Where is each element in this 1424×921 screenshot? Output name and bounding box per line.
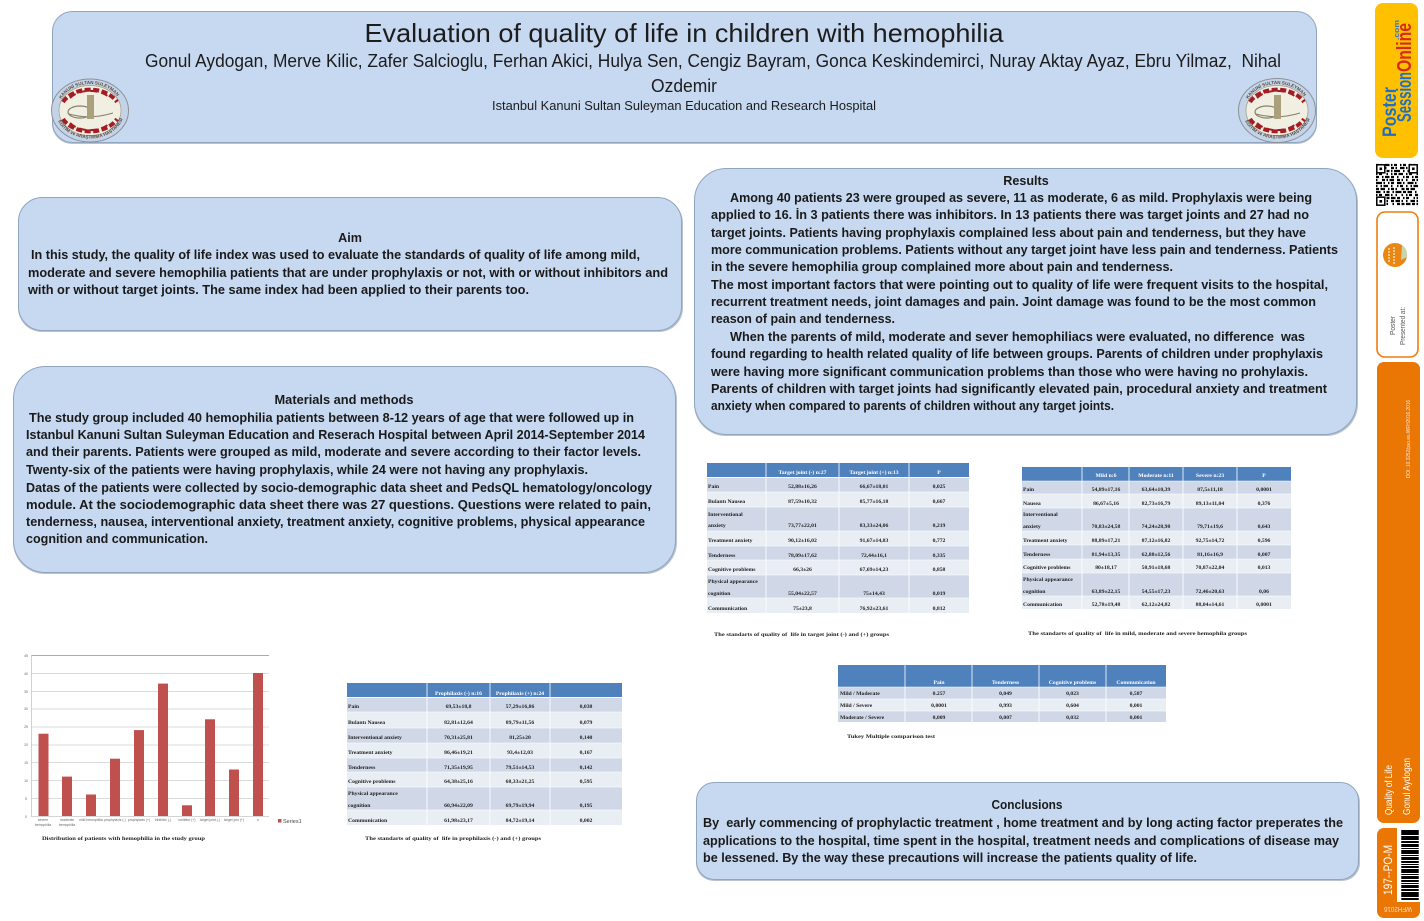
table: severity groups: 52,78±19,48 [1092, 602, 1121, 608]
table: target joint groups [707, 463, 969, 613]
table: target joint groups: Pain [708, 484, 720, 490]
table: prophylaxis groups: 60,94±22,09 [444, 803, 473, 809]
table: target joint groups: 0,812 [933, 606, 946, 612]
table: severity groups: 62,88±12,56 [1142, 552, 1171, 558]
table: prophylaxis groups: 0,595 [580, 779, 593, 785]
table: Tukey comparison: 0,023 [1066, 691, 1079, 697]
text: conclusions body: By early commencing of prophylactic treatment , home treatment and by long acting factor preperates the [703, 815, 1343, 830]
table: severity groups: Severe n:23 [1196, 473, 1224, 479]
table: prophylaxis groups: 0,002 [580, 818, 593, 824]
text: results body: recurrent treatment needs, joint damages and pain. Joint damage was found to be the most common [711, 294, 1316, 309]
heading: materials and methods: Materials and methods [274, 393, 414, 407]
panel: conclusions [696, 782, 1360, 881]
text: materials and methods body: The study group included 40 hemophilia patients between 8-12 years of age that were followed up in [29, 410, 634, 425]
table: severity groups: 0,013 [1258, 565, 1271, 571]
table: prophylaxis groups: 81,25±20 [509, 735, 531, 741]
table: severity groups: 0,06 [1259, 589, 1269, 595]
table: severity groups: 87,5±11,18 [1197, 487, 1223, 493]
text: results body [710, 190, 1338, 413]
table: target joint groups: 85,77±16,18 [860, 499, 889, 505]
table: prophylaxis groups: Prophilaxis (-) n:16 [435, 690, 482, 697]
table: severity groups [1022, 467, 1291, 609]
table: prophylaxis groups: 89,79±11,56 [506, 720, 534, 726]
axis labels: 0 [25, 815, 27, 819]
table: target joint groups: Physical appearance [708, 579, 758, 585]
table: target joint groups: 87,59±10,32 [788, 499, 817, 505]
authors: Ozdemir [651, 76, 717, 96]
table: severity groups: 0,007 [1258, 552, 1271, 558]
table: prophylaxis groups: 0,079 [580, 720, 593, 726]
axis labels [24, 654, 259, 827]
table: severity groups: 62,12±24,82 [1142, 602, 1171, 608]
table: target joint groups: 0,858 [933, 567, 946, 573]
table: target joint groups: anxiety [708, 523, 726, 529]
sidebar: PosterSessionOnline logo: Online [1394, 23, 1416, 72]
table: severity groups: anxiety [1023, 524, 1041, 530]
text: results body: Parents of children with target joints had significantly elevated pain, procedural anxiety and treatment [711, 381, 1328, 396]
axis labels: 45 [24, 654, 28, 658]
table: Tukey comparison: Pain [933, 680, 945, 686]
text: results body: found regarding to health related quality of life between groups. Parents of children under prophylaxis [711, 346, 1323, 361]
table: severity groups: 86,67±5,16 [1093, 501, 1119, 507]
text: materials and methods body: module. At the sociodemographic data sheet there was 27 questions. Questions were related to pain, [26, 497, 651, 512]
table: target joint groups: 55,04±22,57 [788, 591, 817, 597]
table: target joint groups: 91,67±14,83 [860, 538, 889, 544]
table: severity groups: 81,16±16,9 [1197, 552, 1223, 558]
table: Tukey comparison: Communication [1116, 680, 1156, 686]
table: target joint groups: 66,3±26 [793, 567, 812, 573]
table: prophylaxis groups: 0,038 [580, 704, 593, 710]
axis labels: inhibitor (+) [178, 818, 196, 822]
icon: hospital logo right: EĞİTİM ve ARAŞTIRMA HASTANESİ [1245, 118, 1310, 140]
table: Tukey comparison: 0,001 [1130, 715, 1143, 721]
text: results body: anxiety when compared to parents of children without any target joints. [711, 398, 1114, 413]
table: prophylaxis groups: 84,72±19,14 [506, 818, 535, 824]
table: severity groups: Treatment anxiety [1023, 538, 1068, 544]
panel: aim [18, 198, 683, 332]
table: prophylaxis groups: 0,195 [580, 803, 593, 809]
table: Tukey comparison: Tenderness [992, 680, 1020, 686]
text: results body: applied to 16. İn 3 patients there was inhibitors. In 13 patients there was target joints and 27 had no [711, 207, 1309, 222]
table: severity groups: 74,24±28,98 [1142, 524, 1171, 530]
text: conclusions body: be lessened. By the way these precautions will increase the patients quality of life. [703, 850, 1197, 865]
icon: hospital logo right: KANUNİ SULTAN SULEYMAN [1246, 80, 1306, 99]
text: aim body [27, 247, 668, 297]
table: prophylaxis groups: 79,51±14,53 [506, 765, 535, 771]
text: results body: more communication problems. Patients without any target joint have less pain and tenderness. Patients [711, 242, 1338, 257]
table: target joint groups: Treatment anxiety [708, 538, 753, 544]
table: severity groups: Physical appearance [1023, 577, 1073, 583]
table: prophylaxis groups: 68,33±21,25 [506, 779, 535, 785]
sidebar: PosterSessionOnline logo: Session [1394, 72, 1416, 122]
text: conclusions body [703, 815, 1343, 865]
poster id: 197--PO-M [1381, 845, 1395, 895]
table: severity groups: 89,13±11,04 [1196, 501, 1224, 507]
axis labels: n [257, 818, 259, 822]
table: severity groups: 54,55±17,23 [1142, 589, 1171, 595]
table: severity groups: Cognitive problems [1023, 565, 1071, 571]
table: target joint groups: Target joint (+) n:13 [849, 469, 899, 476]
table: target joint groups: Bulantı Nausea [708, 499, 745, 505]
table: Tukey comparison: 0,049 [999, 691, 1012, 697]
table: severity groups: 88,04±14,61 [1196, 602, 1225, 608]
table: prophylaxis groups: 0,140 [580, 735, 593, 741]
axis labels: severe [38, 818, 48, 822]
table: target joint groups: 73,77±22,01 [788, 523, 817, 529]
table: severity groups: P [1262, 473, 1266, 479]
sidebar: presented at box [1377, 212, 1418, 357]
text: results body: target joints. Patients having prophylaxis complained less about pain and tenderness, but they have [711, 225, 1306, 240]
table: Tukey comparison: Mild / Severe [840, 703, 873, 709]
axis labels: mild hemophilia [79, 818, 103, 822]
table: prophylaxis groups: 86,46±19,21 [444, 750, 473, 756]
table: target joint groups: 0,667 [933, 499, 946, 505]
table: severity groups: Interventional [1023, 512, 1058, 518]
panel: results [694, 168, 1358, 436]
text: materials and methods body: Datas of the patients were collected by socio-demographic data sheet and PedsQL hematology/oncology [26, 480, 653, 495]
table: prophylaxis groups: Pain [348, 704, 360, 710]
table: severity groups: 0,376 [1258, 501, 1271, 507]
table: prophylaxis groups: 69,53±18,8 [446, 704, 472, 710]
table: target joint groups: Cognitive problems [708, 567, 756, 573]
table: severity groups: Pain [1023, 487, 1035, 493]
table: Tukey comparison: 0,032 [1066, 715, 1079, 721]
axis labels: hemophilia [59, 823, 75, 827]
table: severity groups: 63,64±10,39 [1142, 487, 1171, 493]
table: prophylaxis groups: Interventional anxiety [348, 735, 402, 741]
table: target joint groups: 0,019 [933, 591, 946, 597]
table: prophylaxis groups: Bulantı Nausea [348, 720, 385, 726]
sidebar: PosterSessionOnline logo [1375, 3, 1418, 158]
doi: DOI: 10.3252/pso.eu.WFH2016.2016 [1406, 400, 1412, 478]
table: severity groups: 50,91±18,68 [1142, 565, 1171, 571]
table: Tukey comparison: Moderate / Severe [840, 715, 885, 721]
icon: hospital logo left: KANUNİ SULTAN SULEYMAN [58, 80, 120, 99]
text: materials and methods body: and their parents. Patients were grouped as mild, moderate and severe according to their factor levels. [26, 444, 641, 459]
table: severity groups: 70,83±24,58 [1092, 524, 1121, 530]
table: target joint groups: 78,09±17,62 [788, 553, 817, 559]
heading: results: Results [1003, 174, 1049, 188]
table: target joint groups: 67,69±14,23 [860, 567, 889, 573]
sidebar: PosterSessionOnline logo: .com [1394, 20, 1401, 40]
title: Evaluation of quality of life in children with hemophilia [364, 18, 1004, 48]
table: target joint groups: 90,12±16,02 [788, 538, 817, 544]
text: results body: The most important factors that were pointing out to quality of life were frequent visits to the hospital, [711, 277, 1328, 292]
table: prophylaxis groups: cognition [348, 803, 371, 809]
table: target joint groups: 0,772 [933, 538, 946, 544]
axis labels: 30 [24, 707, 28, 711]
table: prophylaxis groups: Physical appearance [348, 791, 398, 797]
axis labels: inhibitor (-) [155, 818, 171, 822]
table: prophylaxis groups: 82,81±12,64 [444, 720, 473, 726]
icon: QR code [1376, 165, 1418, 205]
table: severity groups: 92,75±14,72 [1196, 538, 1225, 544]
caption: chart: Distribution of patients with hemophilia in the study group [42, 836, 205, 842]
table: Tukey comparison: 0.257 [933, 691, 946, 697]
bar chart: distribution of patients [24, 654, 302, 827]
caption: prophylaxis table: The standarts of quality of life in prophilaxis (-) and (+) groups [365, 835, 542, 842]
table: prophylaxis groups: 93,4±12,03 [507, 750, 533, 756]
icon: hospital logo left [51, 78, 129, 142]
axis labels: 10 [24, 779, 28, 783]
table: target joint groups: 0,219 [933, 523, 946, 529]
table: Tukey comparison: 0,587 [1130, 691, 1143, 697]
table: severity groups: 70,87±22,04 [1196, 565, 1225, 571]
icon: hospital logo right [1238, 78, 1316, 143]
table: Tukey comparison: Mild / Moderate [840, 691, 880, 697]
text: materials and methods body: Twenty-six of the patients were having prophylaxis, while 24 were not having any prophylaxis. [26, 462, 588, 477]
axis labels: prophylaxis (-) [104, 818, 126, 822]
heading: aim: Aim [338, 231, 362, 245]
table: target joint groups: Target joint (-) n:27 [779, 469, 827, 476]
axis labels: hemophilia [35, 823, 51, 827]
table: prophylaxis groups: Prophilaxis (+) n:24 [496, 690, 544, 697]
table: Tukey comparison: Cognitive problems [1049, 680, 1097, 686]
text: conclusions body: applications to the hospital, time spent in the hospital, treatment needs and complications of disease may [703, 833, 1340, 848]
panel: materials and methods [13, 366, 677, 574]
axis labels: moderate [60, 818, 74, 822]
affiliation: Istanbul Kanuni Sultan Suleyman Education and Research Hospital [492, 98, 876, 113]
text: materials and methods body: cognition and communication. [26, 531, 208, 546]
text: materials and methods body: tenderness, nausea, interventional anxiety, treatment anxiety, cognitive problems, physical appearance [26, 514, 645, 529]
table: severity groups: Nausea [1023, 501, 1041, 507]
axis labels: prophylaxis (+) [128, 818, 150, 822]
text: poster presented at: Poster [1390, 315, 1397, 335]
table: Tukey comparison: 0,001 [1130, 703, 1143, 709]
table: target joint groups: 83,33±24,06 [860, 523, 889, 529]
caption: Tukey table: Tukey Multiple comparison test [847, 734, 935, 740]
table: target joint groups: P [937, 470, 941, 476]
text: results body: Among 40 patients 23 were grouped as severe, 11 as moderate, 6 as mild. Prophylaxis were being [730, 190, 1312, 205]
table: severity groups: Moderate n:11 [1138, 473, 1174, 479]
table: Tukey comparison: 0,007 [999, 715, 1012, 721]
table: Tukey comparison: 0,009 [933, 715, 946, 721]
table: prophylaxis groups: 61,98±23,17 [444, 818, 473, 824]
table: target joint groups: 0,335 [933, 553, 946, 559]
authors [145, 51, 1281, 96]
table: severity groups: 54,89±17,16 [1092, 487, 1121, 493]
text: results body: were having more significant communication problems than those who were having no prohylaxis. [710, 364, 1308, 379]
label: WFH2016: WFH2016 [1384, 905, 1412, 912]
axis labels: 40 [24, 672, 28, 676]
table: target joint groups: 72,44±16,1 [861, 553, 887, 559]
heading: conclusions: Conclusions [992, 798, 1062, 812]
table: severity groups: 79,71±19,6 [1197, 524, 1223, 530]
table: prophylaxis groups: Communication [348, 818, 388, 824]
text: results body: When the parents of mild, moderate and sever hemophiliacs were evaluated, no difference was [730, 329, 1305, 344]
authors: Gonul Aydogan, Merve Kilic, Zafer Salcioglu, Ferhan Akici, Hulya Sen, Cengiz Bayram, Gonca Keskindemirci, Nuray Aktay Ayaz, Ebru Yilmaz, Nihal [145, 51, 1281, 71]
table: target joint groups: 66,67±18,01 [860, 484, 889, 490]
axis labels: 20 [24, 743, 28, 747]
table: severity groups: 82,73±16,79 [1142, 501, 1171, 507]
table: severity groups: Mild n:6 [1095, 473, 1117, 479]
table: severity groups: cognition [1023, 589, 1046, 595]
bars [38, 673, 263, 816]
table: target joint groups: Communication [708, 606, 748, 612]
table: target joint groups: Tenderness [708, 553, 736, 559]
table: prophylaxis groups: 69,79±19,94 [506, 803, 535, 809]
table: Tukey comparison: 0,604 [1066, 703, 1079, 709]
table: Tukey comparison: 0,993 [999, 703, 1012, 709]
axis labels: target join (+) [224, 818, 244, 822]
axis labels: 5 [25, 797, 27, 801]
table: severity groups: 81,94±13,35 [1092, 552, 1121, 558]
sidebar: poster id and barcode [1377, 828, 1420, 918]
table: severity groups: Tenderness [1023, 552, 1051, 558]
table: prophylaxis groups: 70,31±25,81 [444, 735, 473, 741]
panel: title header [51, 11, 1317, 144]
text: results body: in the severe hemophilia group complained more about pain and tenderness. [711, 259, 1173, 274]
table: prophylaxis groups: Cognitive problems [348, 779, 396, 785]
table: severity groups: 63,89±22,15 [1092, 589, 1121, 595]
table: prophylaxis groups: 57,29±16,86 [506, 704, 535, 710]
table: severity groups: 72,46±20,63 [1196, 589, 1225, 595]
table: prophylaxis groups: 0,142 [580, 765, 593, 771]
axis labels: 35 [24, 690, 28, 694]
table: prophylaxis groups [347, 683, 622, 825]
table: prophylaxis groups: 71,35±19,95 [444, 765, 473, 771]
table: target joint groups: cognition [708, 591, 731, 597]
icon: conference logo [1383, 243, 1407, 267]
text: poster presented at: Presented at: [1400, 307, 1407, 345]
table: target joint groups: Interventional [708, 512, 743, 518]
table: severity groups: 88,89±17,21 [1092, 538, 1121, 544]
table: severity groups: 0,596 [1258, 538, 1271, 544]
table: severity groups: 80±18,17 [1095, 565, 1117, 571]
table: severity groups: Communication [1023, 602, 1063, 608]
table: target joint groups: 0,025 [933, 484, 946, 490]
author: Gonul Aydogan [1402, 758, 1413, 815]
table: severity groups: 0,0001 [1256, 602, 1272, 608]
table: target joint groups: 52,88±16,26 [788, 484, 817, 490]
table: target joint groups: 75±23,8 [793, 606, 812, 612]
legend: Series1 [283, 819, 302, 825]
icon: hospital logo left: EĞİTİM ve ARAŞTIRMA HASTANESİ [58, 118, 123, 140]
table: Tukey comparison [838, 665, 1166, 722]
table: Tukey comparison: 0,0001 [931, 703, 947, 709]
table: prophylaxis groups: Tenderness [348, 765, 376, 771]
text: aim body: In this study, the quality of life index was used to evaluate the standards of quality of life among mild, [31, 247, 640, 262]
text: aim body: with or without target joints. The same index had been applied to their parents too. [27, 282, 529, 297]
table: prophylaxis groups: Treatment anxiety [348, 750, 393, 756]
table: target joint groups: 75±14,43 [863, 591, 885, 597]
table: prophylaxis groups: 0,167 [580, 750, 593, 756]
table: severity groups: 0,0001 [1256, 487, 1272, 493]
icon: barcode [1401, 830, 1419, 900]
axis labels: 15 [24, 761, 28, 765]
text: aim body: moderate and severe hemophilia patients that are under prophylaxis or not, with or without inhibitors and [28, 265, 668, 280]
text: materials and methods body [26, 410, 653, 546]
topic: Quality of Life [1384, 765, 1395, 815]
table: severity groups: 87,12±16,82 [1142, 538, 1171, 544]
caption: severity table: The standarts of quality of life in mild, moderate and severe hemophila groups [1028, 631, 1248, 637]
text: poster presented at [1390, 307, 1407, 345]
sidebar: PosterSessionOnline logo: Poster [1380, 86, 1401, 137]
axis labels: 25 [24, 725, 28, 729]
text: results body: reason of pain and tenderness. [711, 311, 895, 326]
sidebar: topic and author band [1377, 362, 1420, 823]
text: materials and methods body: Istanbul Kanuni Sultan Suleyman Education and Reserach Hospital between April 2014-September 2014 [26, 427, 646, 442]
table: prophylaxis groups: 64,38±25,16 [444, 779, 473, 785]
axis labels: target joint (-) [200, 818, 220, 822]
caption: target joint table: The standarts of quality of life in target joint (-) and (+) groups [714, 631, 890, 638]
table: severity groups: 0,643 [1258, 524, 1271, 530]
table: target joint groups: 76,92±23,61 [860, 606, 889, 612]
